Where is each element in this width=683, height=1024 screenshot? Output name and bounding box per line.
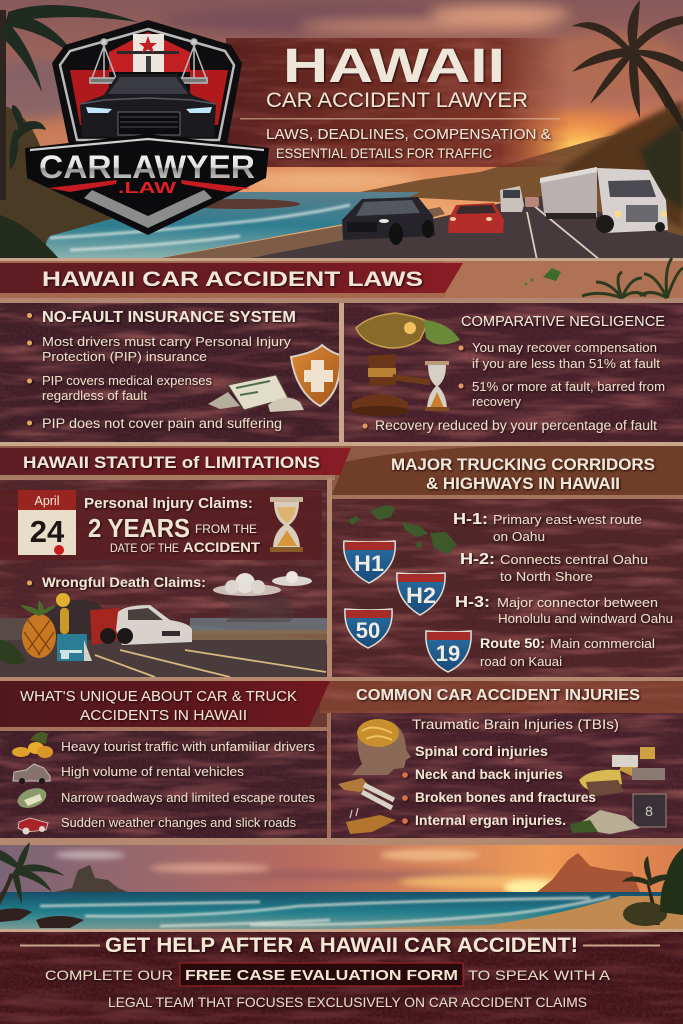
sign: 50: 50 (356, 618, 380, 643)
banner: what's unique (0, 681, 330, 727)
cta text: TO SPEAK WITH A (468, 967, 611, 983)
highway descriptions: road on Kauai (480, 654, 562, 669)
highway descriptions: Connects central Oahu (500, 552, 648, 567)
separator band (0, 677, 683, 731)
highway descriptions: Major connector between (497, 595, 658, 610)
icon: rubble and bandages: 8 (645, 803, 653, 819)
shore rocks (0, 908, 84, 928)
sand (340, 896, 683, 929)
personal injury callout (0, 490, 322, 560)
left palm (0, 5, 138, 200)
highway descriptions: H-3: (455, 594, 490, 611)
panel: common injuries (331, 713, 683, 838)
list (61, 739, 316, 830)
logo: CarLawyer.law badge: .LAW (118, 180, 177, 197)
banner: what's unique: WHAT'S UNIQUE ABOUT CAR & TRUCK (20, 688, 297, 705)
scales of justice (90, 39, 207, 83)
car front (80, 74, 216, 137)
tagline: LAWS, DEADLINES, COMPENSATION & (266, 126, 551, 143)
hero scene (0, 0, 683, 260)
icon: narrow road car (15, 784, 49, 812)
road (240, 196, 683, 260)
vehicles (342, 167, 668, 245)
black suv (342, 197, 435, 245)
bullets and text (362, 313, 665, 433)
highway descriptions: Route 50: (480, 636, 545, 651)
icon: orange shield with cross (291, 345, 340, 406)
panel: statute of limitations (0, 478, 332, 678)
sign: 19: 19 (436, 641, 460, 666)
cta text: COMPLETE OUR (45, 967, 173, 983)
right palms and tree (622, 848, 683, 926)
dark wrecked car (45, 600, 110, 640)
personal injury callout: Personal Injury Claims: (84, 496, 253, 512)
separator band (0, 442, 683, 495)
road wall (150, 207, 445, 260)
list: Traumatic Brain Injuries (TBIs) (412, 717, 619, 732)
bullets and text: Most drivers must carry Personal Injury (42, 334, 292, 349)
banner: statute of limitations (0, 448, 351, 475)
highway descriptions: Honolulu and windward Oahu (498, 611, 673, 626)
panel: what's unique (0, 713, 331, 838)
highway descriptions (453, 511, 673, 669)
panel: no-fault insurance (0, 303, 340, 442)
personal injury callout: ACCIDENT (183, 540, 261, 555)
tagline (266, 126, 551, 161)
separator strip with sunset (0, 258, 683, 303)
banner: Hawaii car accident laws: HAWAII CAR ACCIDENT LAWS (42, 268, 423, 291)
heading: trucking corridors (391, 456, 655, 493)
icon: head with brain (352, 719, 411, 775)
personal injury callout: DATE OF THE (110, 543, 179, 555)
road accident scene (0, 571, 327, 677)
logo: CarLawyer.law badge: CARLAWYER (39, 149, 255, 185)
icon: rental car (13, 764, 50, 784)
bullets and text: Protection (PIP) insurance (42, 349, 207, 364)
ocean (30, 192, 420, 260)
bullets and text: COMPARATIVE NEGLIGENCE (461, 313, 665, 330)
white van (500, 186, 524, 212)
sea (0, 892, 683, 929)
white car (116, 605, 192, 645)
list: Spinal cord injuries (415, 743, 548, 759)
left foliage (0, 105, 135, 260)
sign: H2: H2 (406, 583, 436, 608)
bullets and text: Recovery reduced by your percentage of fault (375, 418, 657, 433)
rock island (55, 865, 128, 892)
sign: H2 (397, 573, 445, 615)
list: Narrow roadways and limited escape routes (61, 790, 315, 805)
heading: trucking corridors: & HIGHWAYS IN HAWAII (426, 475, 620, 493)
icon: hourglass (270, 497, 303, 552)
sign: H1: H1 (354, 551, 384, 576)
decorative palms and islands (524, 258, 683, 298)
sign: 50 (345, 609, 392, 648)
red car (448, 203, 504, 233)
icon: Hawaiian islands (348, 505, 457, 554)
subtitle: CAR ACCIDENT LAWYER (266, 89, 528, 112)
right palm (572, 0, 683, 132)
title: Hawaii: HAWAII (283, 40, 505, 93)
cta text: LEGAL TEAM THAT FOCUSES EXCLUSIVELY ON CAR ACCIDENT CLAIMS (108, 994, 587, 1010)
wrongful death label: Wrongful Death Claims: (42, 574, 206, 590)
bullets and text: 51% or more at fault, barred from (472, 379, 665, 394)
tagline: ESSENTIAL DETAILS FOR TRAFFIC (276, 145, 492, 161)
list: Broken bones and fractures (415, 789, 596, 805)
sign: H1 (344, 541, 395, 583)
icon: rubble and bandages (570, 747, 666, 834)
icon: calendar: 24 (30, 514, 65, 549)
personal injury callout: 2 YEARS (88, 513, 190, 543)
bullets and text: regardless of fault (42, 388, 147, 403)
heading: common injuries: COMMON CAR ACCIDENT INJURIES (356, 687, 640, 704)
panel: highways (332, 495, 683, 677)
list: Neck and back injuries (415, 766, 563, 782)
icon: pineapple (0, 600, 56, 665)
highway descriptions: H-1: (453, 511, 488, 528)
clouds and rain (213, 571, 312, 622)
beach scene (0, 838, 683, 929)
name banner (25, 134, 269, 235)
icon: wrecked white van (208, 375, 304, 412)
personal injury callout: FROM THE (195, 522, 257, 536)
list: High volume of rental vehicles (61, 764, 245, 779)
flag crest (109, 32, 190, 72)
heading: trucking corridors: MAJOR TRUCKING CORRIDORS (391, 456, 655, 474)
bullets and text (27, 309, 296, 431)
bullets and text: if you are less than 51% at fault (472, 356, 660, 371)
highway descriptions: Primary east-west route (493, 512, 642, 527)
title panel (226, 38, 568, 167)
icon: calendar: April (34, 494, 60, 508)
bullets and text: PIP does not cover pain and suffering (42, 416, 282, 431)
panel: comparative negligence (339, 303, 683, 442)
call to action panel (0, 929, 683, 1024)
hillside (360, 110, 683, 240)
list: Sudden weather changes and slick roads (61, 815, 296, 830)
banner: Hawaii car accident laws (0, 263, 463, 293)
icon: pineapples (12, 732, 53, 758)
right mountain (537, 853, 640, 892)
white truck (540, 167, 668, 233)
cta form button: FREE CASE EVALUATION FORM (185, 967, 458, 984)
logo: CarLawyer.law badge (25, 20, 269, 235)
icon: gold island and leaf (356, 313, 460, 348)
bullets and text: You may recover compensation (472, 340, 657, 355)
bullets and text: recovery (472, 394, 521, 409)
red car (90, 608, 122, 645)
icon: gavel (350, 354, 431, 416)
list: Heavy tourist traffic with unfamiliar drivers (61, 739, 316, 754)
cta form button (180, 963, 463, 986)
icon: hourglass (425, 361, 449, 411)
highway descriptions: Main commercial (550, 636, 655, 651)
highway descriptions: on Oahu (493, 529, 545, 544)
icon: souvenir bags (56, 593, 92, 661)
icon: calendar (18, 490, 76, 555)
list (402, 717, 619, 828)
highway descriptions: to North Shore (500, 569, 593, 584)
banner: what's unique: ACCIDENTS IN HAWAII (80, 707, 247, 724)
cta text (45, 967, 611, 1010)
waves (40, 897, 610, 926)
sign: 19 (426, 631, 471, 672)
icon: broken arm (338, 778, 394, 808)
bullets and text: NO-FAULT INSURANCE SYSTEM (42, 309, 296, 326)
sky clouds (0, 5, 683, 188)
cta heading: GET HELP AFTER A HAWAII CAR ACCIDENT! (105, 934, 578, 957)
list: Internal ergan injuries. (415, 812, 566, 828)
banner: statute of limitations: HAWAII STATUTE of LIMITATIONS (23, 453, 320, 472)
icon: injured leg (346, 808, 396, 834)
highway descriptions: H-2: (460, 551, 495, 568)
left palm (0, 842, 65, 905)
bullets and text: PIP covers medical expenses (42, 373, 212, 388)
icon: red car (18, 818, 48, 834)
